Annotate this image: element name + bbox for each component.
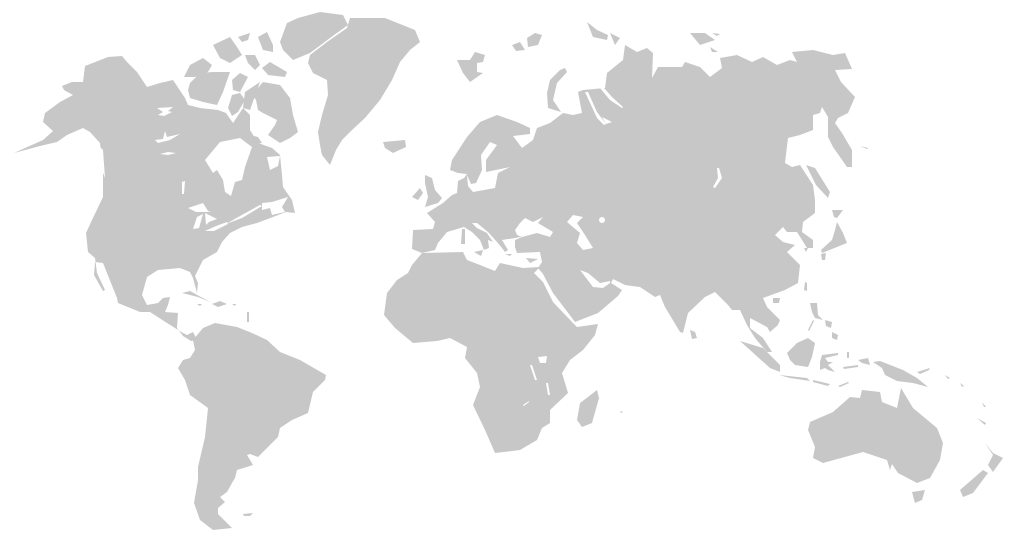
South America	[178, 323, 326, 530]
Australia and Tasmania	[808, 388, 943, 503]
Madagascar	[577, 390, 599, 427]
Falkland Islands	[243, 513, 253, 516]
Eurasia	[412, 45, 855, 352]
Pacific islands	[620, 146, 986, 425]
New Zealand	[960, 443, 1003, 497]
British Isles	[412, 175, 442, 207]
Greenland	[308, 18, 420, 165]
Arctic archipelago	[184, 12, 348, 143]
Hudson Bay and lakes	[95, 107, 288, 231]
Africa	[384, 252, 598, 453]
Arctic islands of Eurasia	[457, 22, 720, 112]
Caribbean islands	[182, 291, 249, 322]
Mediterranean islands	[461, 229, 538, 263]
inland seas	[467, 88, 722, 288]
New Guinea	[873, 361, 930, 387]
North America	[14, 56, 295, 341]
Japan and Sakhalin	[804, 165, 847, 260]
African lakes	[523, 356, 550, 406]
Iceland	[383, 140, 406, 153]
South-East Asia islands	[690, 282, 870, 387]
